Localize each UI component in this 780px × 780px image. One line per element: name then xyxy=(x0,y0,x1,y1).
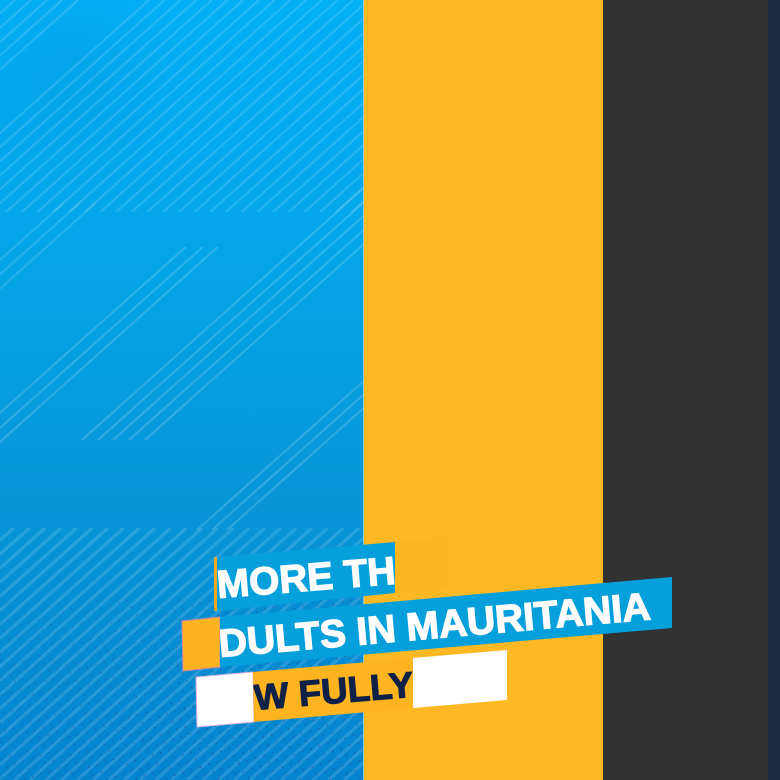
line 2 strip: dults in mauritania: DULTS IN MAURITANIA xyxy=(217,585,652,666)
line 1 strip: more th: MORE TH xyxy=(215,550,397,607)
panel: dark grey column xyxy=(603,0,768,780)
panel: yellow column xyxy=(364,0,603,780)
panel: blue column xyxy=(0,0,364,780)
panel: navy edge column xyxy=(768,0,780,780)
line 3 strip: w fully xyxy=(196,650,507,727)
line 3 strip: w fully: W FULLY xyxy=(252,664,415,718)
headline banner xyxy=(182,537,672,727)
